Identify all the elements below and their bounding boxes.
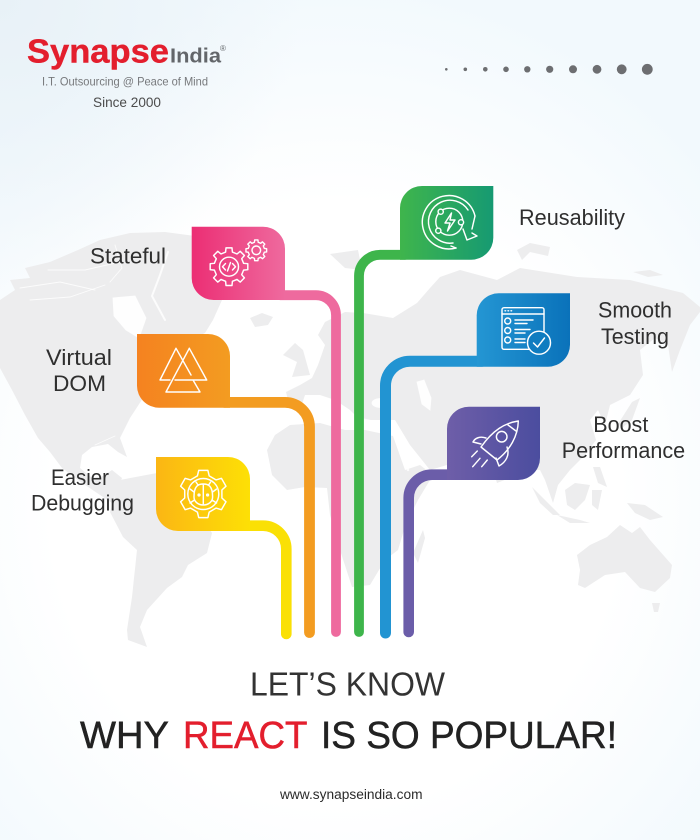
connector: orange <box>225 402 310 632</box>
icon: reuse cycle <box>422 196 477 249</box>
tile: purple <box>447 407 540 480</box>
tile: blue <box>477 293 570 367</box>
label: Boost Performance: Boost <box>593 412 648 437</box>
heading line two: IS SO POPULAR! <box>321 715 617 757</box>
connector: blue <box>386 361 482 633</box>
logo <box>27 33 226 110</box>
tile: orange <box>137 334 230 408</box>
branch: Stateful <box>90 227 336 632</box>
label: Virtual DOM: Virtual <box>46 345 112 370</box>
label: Reusability: Reusability <box>519 205 625 230</box>
icon: bug gear <box>181 470 226 518</box>
logo wordmark: India: India <box>170 46 222 68</box>
label: Smooth Testing: Testing <box>601 324 669 349</box>
since line: Since 2000 <box>93 94 161 110</box>
tile: green <box>400 186 493 260</box>
heading line two <box>80 715 617 757</box>
heading line two: WHY <box>80 715 169 757</box>
label: Easier Debugging: Easier <box>51 465 109 490</box>
label: Boost Performance: Performance <box>562 438 685 463</box>
icon: triangles <box>160 348 207 392</box>
heading line two: REACT <box>183 715 308 757</box>
icon: checklist <box>502 308 550 354</box>
world map <box>0 232 700 647</box>
tile: yellow <box>156 457 250 531</box>
branch: Virtual DOM <box>46 334 310 632</box>
connector: yellow <box>245 526 286 634</box>
label: Easier Debugging <box>31 465 134 516</box>
decorative dot row <box>445 64 653 75</box>
label: Smooth Testing <box>598 298 672 349</box>
logo wordmark: Synapse: Synapse <box>27 33 169 70</box>
branch: Reusability <box>359 186 625 632</box>
icon: code gears <box>210 240 267 286</box>
tagline: I.T. Outsourcing @ Peace of Mind <box>42 75 208 89</box>
website url: www.synapseindia.com <box>279 787 422 802</box>
branch: Easier Debugging <box>31 457 286 634</box>
label: Virtual DOM <box>46 345 112 396</box>
label: Boost Performance <box>562 412 685 463</box>
icon: rocket <box>472 421 518 467</box>
registered mark: ® <box>220 44 226 53</box>
label: Smooth Testing: Smooth <box>598 298 672 323</box>
connector: green <box>359 255 405 632</box>
heading <box>80 667 617 757</box>
label: Stateful: Stateful <box>90 244 166 268</box>
tile: pink <box>192 227 285 300</box>
label: Easier Debugging: Debugging <box>31 491 134 516</box>
branch: Smooth Testing <box>386 293 672 633</box>
branch: Boost Performance <box>409 407 685 632</box>
heading line one: LET’S KNOW <box>250 667 445 704</box>
label: Virtual DOM: DOM <box>53 371 106 396</box>
map detail: inland seas and channels <box>20 245 470 470</box>
connector: purple <box>409 475 452 632</box>
connector: pink <box>280 295 336 632</box>
